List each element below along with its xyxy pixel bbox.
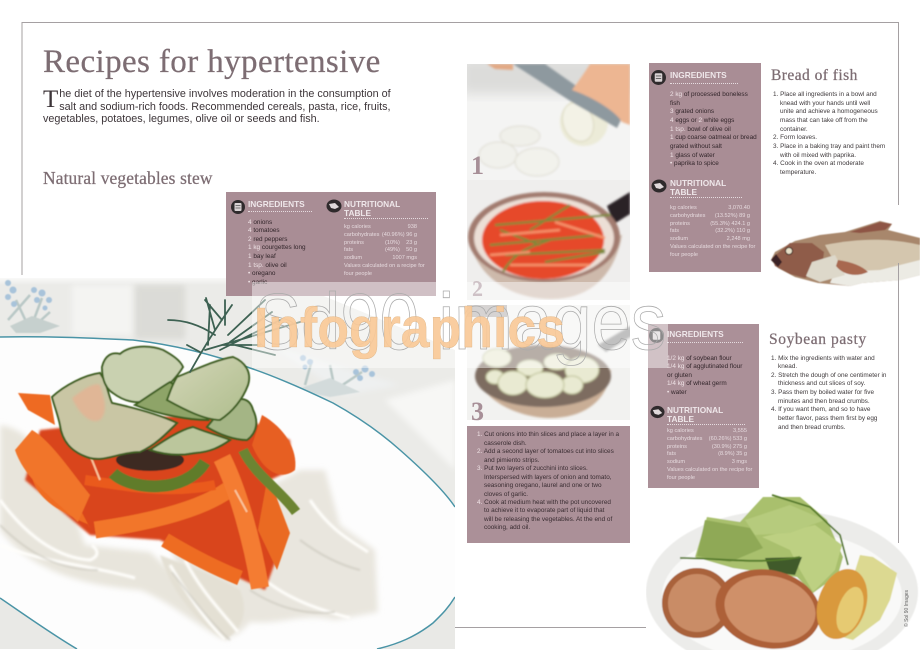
nutrition table: (32.2%) 110 g [715, 228, 750, 234]
ingredients list: 4 eggs or 2 white eggs [670, 117, 734, 124]
panel: stew preparation steps: 3. Put two layers of zucchini into slices. [477, 465, 588, 472]
ingredients list: or gluten [667, 372, 692, 379]
ingredients list: fish [670, 100, 680, 107]
photo credit: © Sol 90 Images [904, 590, 910, 627]
icon: ingredients [651, 70, 666, 85]
heading: nutritional table [670, 178, 726, 197]
nutrition table: (40.96%) 96 g [382, 232, 417, 238]
bread of fish steps: knead with your hands until well [780, 100, 870, 107]
panel: stew preparation steps: 1. Cut onions into thin slices and place a layer in a [477, 431, 619, 438]
panel: stew preparation steps: casserole dish. [484, 440, 527, 447]
ingredients list [248, 218, 306, 286]
nutrition table: fats [670, 228, 679, 234]
ingredients list: 4 tomatoes [248, 227, 280, 234]
panel: stew preparation steps: 4. Cook at medium heat with the pot uncovered [477, 499, 611, 506]
bread of fish steps: mass that can take off from the [780, 117, 868, 124]
nutrition table: fats [667, 451, 676, 457]
bread of fish steps: 4. Cook in the oven at moderate [773, 160, 864, 167]
nutrition table: kg calories [670, 205, 697, 211]
nutrition table: 3,555 [733, 428, 747, 434]
panel: bread of fish ingredients and nutrition [649, 63, 761, 272]
intro text block: T [43, 86, 58, 113]
nutrition table: 3 mgs [732, 459, 747, 465]
icon: nutrition [326, 200, 342, 212]
photo: step 2 pan with peppers [467, 180, 630, 300]
nutrition table: (8.9%) 35 g [718, 451, 747, 457]
ingredients list: 4 onions [248, 218, 272, 226]
icon: nutrition [650, 406, 664, 418]
heading: natural vegetables stew: Natural vegetables stew [43, 168, 213, 188]
soybean pasty steps: 4. If you want them, and so to have [771, 406, 870, 413]
nutrition table [670, 205, 756, 258]
ingredients list: 3 grated onions [670, 108, 714, 115]
photo: step 3 pan with zucchini [467, 305, 630, 420]
heading: nutritional table: TABLE [670, 187, 697, 197]
peppers [15, 393, 296, 590]
ingredients list: • garlic [248, 279, 267, 286]
nutrition table: (30.9%) 275 g [712, 444, 747, 450]
panel: stew preparation steps: Interspersed with layers of onion and tomato, [484, 474, 612, 481]
ingredients list: grated without salt [670, 143, 722, 150]
nutrition table: 1007 mgs [392, 255, 417, 261]
heading: ingredients: INGREDIENTS [670, 70, 727, 80]
heading: ingredients: INGREDIENTS [248, 199, 305, 209]
bread of fish steps [773, 91, 885, 176]
title: Recipes for hypertensive [43, 44, 381, 80]
nutrition table: 938 [408, 224, 417, 230]
bread of fish steps: container. [780, 126, 808, 133]
panel: stew preparation steps: 2. Add a second layer of tomatoes cut into slices [477, 448, 614, 455]
panel: stew preparation steps: to achieve it to evaporate part of liquid that [484, 507, 604, 514]
step number 2: 2 [472, 276, 483, 301]
soybean pasty steps: 2. Stretch the dough of one centimeter in [771, 372, 886, 379]
heading: nutritional table [344, 199, 400, 218]
nutrition table: fats [344, 247, 353, 253]
nutrition table: 3,070.40 [728, 205, 750, 211]
photo: vegetable stew on plate [0, 278, 455, 649]
icon: ingredients [231, 200, 245, 214]
icon: nutrition [652, 180, 666, 192]
nutrition table: proteins [670, 221, 690, 227]
intro text block: salt and sodium-rich foods. Recommended cereals, pasta, rice, fruits, [59, 101, 391, 113]
ingredients list: • oregano [248, 270, 275, 277]
panel: stew ingredients and nutrition [226, 192, 436, 296]
soybean pasty steps: 3. Pass them by boiled water for five [771, 389, 874, 396]
panel: stew preparation steps: cloves of garlic. [484, 491, 528, 498]
soybean pasty steps: minutes and then bread crumbs. [778, 398, 870, 405]
ingredients list: 1/4 kg of agglutinated flour [667, 363, 742, 370]
soybean pasty steps: knead. [778, 363, 797, 370]
ingredients list: 2 kg of processed boneless [670, 91, 748, 98]
step number 3: 3 [471, 397, 484, 426]
ingredients list: 2 red peppers [248, 236, 287, 243]
nutrition table: (10%) 23 g [385, 240, 417, 246]
panel: stew preparation steps [467, 426, 630, 543]
ingredients list: 1 bay leaf [248, 253, 276, 260]
heading: nutritional table [667, 405, 723, 424]
nutrition table: carbohydrates [344, 232, 379, 238]
ingredients list: • water [667, 389, 687, 396]
nutrition table: kg calories [667, 428, 694, 434]
panel: stew preparation steps: will be releasing the vegetables. At the end of [484, 516, 612, 523]
plate [0, 337, 455, 649]
nutrition table: proteins [667, 444, 687, 450]
ingredients list [667, 354, 742, 396]
ingredients list: 1 tsp. bowl of olive oil [670, 126, 731, 133]
heading: nutritional table: TABLE [344, 208, 371, 218]
nutrition table: sodium [667, 459, 685, 465]
heading: nutritional table: NUTRITIONAL [344, 199, 400, 209]
nutrition table: (49%) 50 g [385, 247, 417, 253]
panel: stew preparation steps: and pimiento strips. [484, 457, 539, 464]
bread of fish steps: 2. Form loaves. [773, 134, 817, 141]
photo: step 1 slicing onion [467, 64, 630, 180]
nutrition table: Values calculated on the recipe for four people [667, 467, 752, 481]
panel: soybean pasty ingredients and nutrition [648, 324, 759, 488]
bread of fish steps: 3. Place in a baking tray and paint them [773, 143, 885, 150]
zucchini [52, 347, 256, 459]
nutrition table: Values calculated on a recipe for four people [344, 263, 425, 277]
panel: stew preparation steps: seasoning oregano, laurel and one or two [484, 482, 602, 489]
soybean pasty steps: thickness and cut slices of soy. [778, 380, 865, 387]
ingredients list: 1 kg courgettes long [248, 244, 306, 251]
rosemary [168, 298, 300, 372]
photo: soybean pasties with salad [646, 494, 918, 650]
nutrition table: carbohydrates [670, 213, 705, 219]
step number 1: 1 [471, 151, 484, 180]
soybean pasty steps [771, 354, 886, 431]
intro text block: vegetables, potatoes, legumes, olive oil or seeds and fish. [43, 113, 320, 125]
ingredients list: 1 glass of water [670, 152, 715, 159]
heading: bread of fish: Bread of fish [771, 67, 858, 84]
nutrition table: kg calories [344, 224, 371, 230]
intro text block: he diet of the hypertensive involves moderation in the consumption of [59, 88, 391, 100]
nutrition table: sodium [344, 255, 362, 261]
soybean pasty steps: 1. Mix the ingredients with water and [771, 354, 875, 362]
ingredients list: 1 cup coarse oatmeal or bread [670, 134, 757, 141]
nutrition table [344, 224, 425, 277]
soybean pasty steps: and then bread crumbs. [778, 424, 846, 431]
heading: nutritional table: NUTRITIONAL [670, 178, 726, 188]
nutrition table: proteins [344, 240, 364, 246]
nutrition table: carbohydrates [667, 436, 702, 442]
photo: fish [770, 220, 920, 286]
nutrition table [667, 428, 752, 481]
heading: nutritional table: NUTRITIONAL [667, 405, 723, 415]
flowers [5, 280, 375, 397]
ingredients list [670, 91, 757, 167]
soybean pasty steps: better flavor, pass them first by egg [778, 415, 877, 422]
intro text block [43, 86, 391, 125]
nutrition table: Values calculated on the recipe for four people [670, 244, 755, 258]
onions [0, 425, 378, 640]
icon: ingredients [649, 328, 664, 343]
ingredients list: 1/4 kg of wheat germ [667, 380, 727, 387]
heading: soybean pasty: Soybean pasty [769, 331, 867, 348]
nutrition table: (55.3%) 424.1 g [710, 221, 750, 227]
nutrition table: (13.52%) 89 g [715, 213, 750, 219]
nutrition table: 2,248 mg [727, 236, 750, 242]
ingredients list: 1 tsp. olive oil [248, 262, 287, 269]
watermark: Infographics [254, 296, 565, 360]
bread of fish steps: 1. Place all ingredients in a bowl and [773, 91, 877, 98]
bread of fish steps: temperature. [780, 169, 816, 176]
nutrition table: (60.26%) 533 g [709, 436, 747, 442]
nutrition table: sodium [670, 236, 688, 242]
panel: stew preparation steps: cooking, add oil. [484, 524, 530, 531]
heading: nutritional table: TABLE [667, 414, 694, 424]
heading: ingredients: INGREDIENTS [667, 329, 724, 339]
bread of fish steps: with oil mixed with paprika. [780, 152, 856, 159]
ingredients list: 1/2 kg of soybean flour [667, 354, 732, 362]
bread of fish steps: unite and achieve a homogeneous [780, 108, 878, 115]
ingredients list: • paprika to spice [670, 160, 719, 167]
